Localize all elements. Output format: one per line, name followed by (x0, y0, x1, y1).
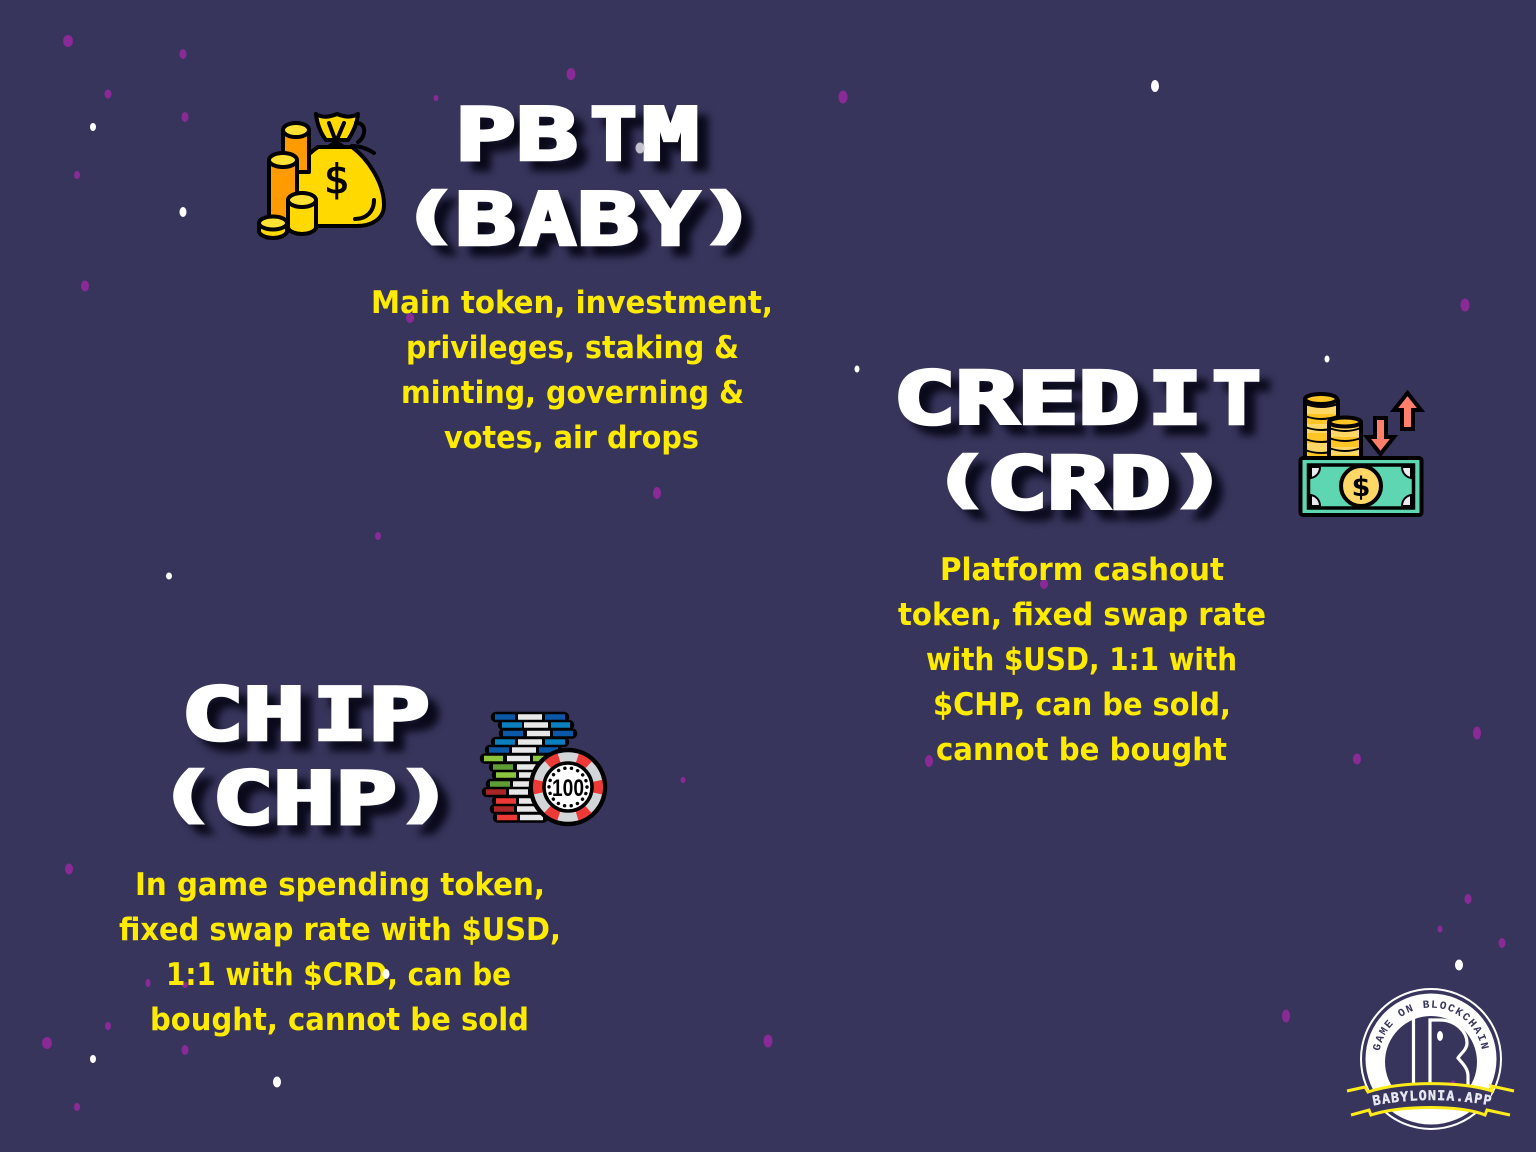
icon: cash with coins and arrows: $ (1352, 472, 1370, 503)
heading: CHIP (CHP): ( (158, 760, 214, 830)
heading: CREDIT (CRD): I (1148, 356, 1202, 440)
heading: CHIP (CHP): H (243, 672, 305, 756)
heading: PBTM (BABY): A (520, 177, 576, 261)
heading: CHIP (CHP): ) (396, 760, 452, 830)
icon: money bag with coins (259, 114, 384, 238)
text block: PBTM description: Main token, investment, (371, 285, 773, 321)
heading: CREDIT (CRD): D (1109, 441, 1171, 525)
text block: CHIP description: 1:1 with $CRD, can be (166, 957, 511, 993)
icon: poker chips stack: 100 (552, 775, 584, 802)
text block: CHIP description (119, 867, 561, 1038)
text block: CHIP description: In game spending token, (135, 867, 545, 903)
heading: PBTM (BABY): B (516, 92, 578, 176)
decorative white dot over text (382, 969, 390, 979)
text block: CREDIT description (898, 552, 1266, 768)
logo: Babylonia badge: BABYLONIA.APP (1372, 1090, 1492, 1106)
decorative faded dot over title (636, 142, 644, 154)
heading: PBTM (BABY): B (577, 177, 639, 261)
heading: CREDIT (CRD): ) (1170, 445, 1226, 515)
heading: CHIP (CHP): P (335, 756, 397, 840)
icon: poker chips stack (484, 717, 605, 824)
text block: CREDIT description: $CHP, can be sold, (933, 687, 1231, 723)
text block: CHIP description: fixed swap rate with $USD, (119, 912, 561, 948)
text block: PBTM description: minting, governing & (401, 375, 744, 411)
icon: cash with coins and arrows (1300, 393, 1422, 515)
heading: CREDIT (CRD): D (1078, 356, 1140, 440)
heading: CHIP (CHP) (158, 672, 452, 840)
text block: CHIP description: bought, cannot be sold (150, 1002, 529, 1038)
heading: PBTM (BABY): P (455, 92, 516, 176)
text block: CREDIT description: token, fixed swap rate (898, 597, 1266, 633)
heading: PBTM (BABY): Y (642, 177, 700, 261)
heading: PBTM (BABY): B (455, 177, 516, 261)
heading: CREDIT (CRD): R (955, 356, 1019, 440)
heading: CREDIT (CRD): T (1212, 356, 1261, 440)
logo: Babylonia badge (1346, 988, 1514, 1130)
heading: PBTM (BABY): ( (402, 181, 458, 251)
heading: CREDIT (CRD): ( (932, 445, 988, 515)
text block: PBTM description: votes, air drops (444, 420, 699, 456)
heading: CHIP (CHP): C (212, 756, 274, 840)
heading: CHIP (CHP): P (368, 672, 430, 756)
heading: CREDIT (CRD): E (1017, 356, 1079, 440)
heading: CREDIT (CRD): R (1047, 441, 1110, 525)
heading: CREDIT (CRD): C (986, 441, 1048, 525)
heading: PBTM (BABY): ) (700, 181, 756, 251)
white confetti dots (90, 80, 1463, 1088)
icon: money bag with coins: $ (324, 157, 350, 203)
heading: PBTM (BABY): T (590, 92, 637, 176)
text block: CREDIT description: Platform cashout (940, 552, 1224, 588)
text block: PBTM description: privileges, staking & (406, 330, 739, 366)
text block: PBTM description (371, 285, 773, 456)
heading: PBTM (BABY) (402, 92, 756, 261)
heading: CREDIT (CRD) (893, 356, 1261, 525)
heading: PBTM (BABY): M (642, 92, 699, 176)
heading: CHIP (CHP): C (181, 672, 244, 756)
heading: CREDIT (CRD): C (893, 356, 956, 440)
logo: Babylonia badge: GAME ON BLOCKCHAIN (1373, 1000, 1489, 1050)
text block: CREDIT description: with $USD, 1:1 with (926, 642, 1237, 678)
heading: CHIP (CHP): I (313, 672, 367, 756)
text block: CREDIT description: cannot be bought (936, 732, 1227, 768)
heading: CHIP (CHP): H (273, 756, 335, 840)
